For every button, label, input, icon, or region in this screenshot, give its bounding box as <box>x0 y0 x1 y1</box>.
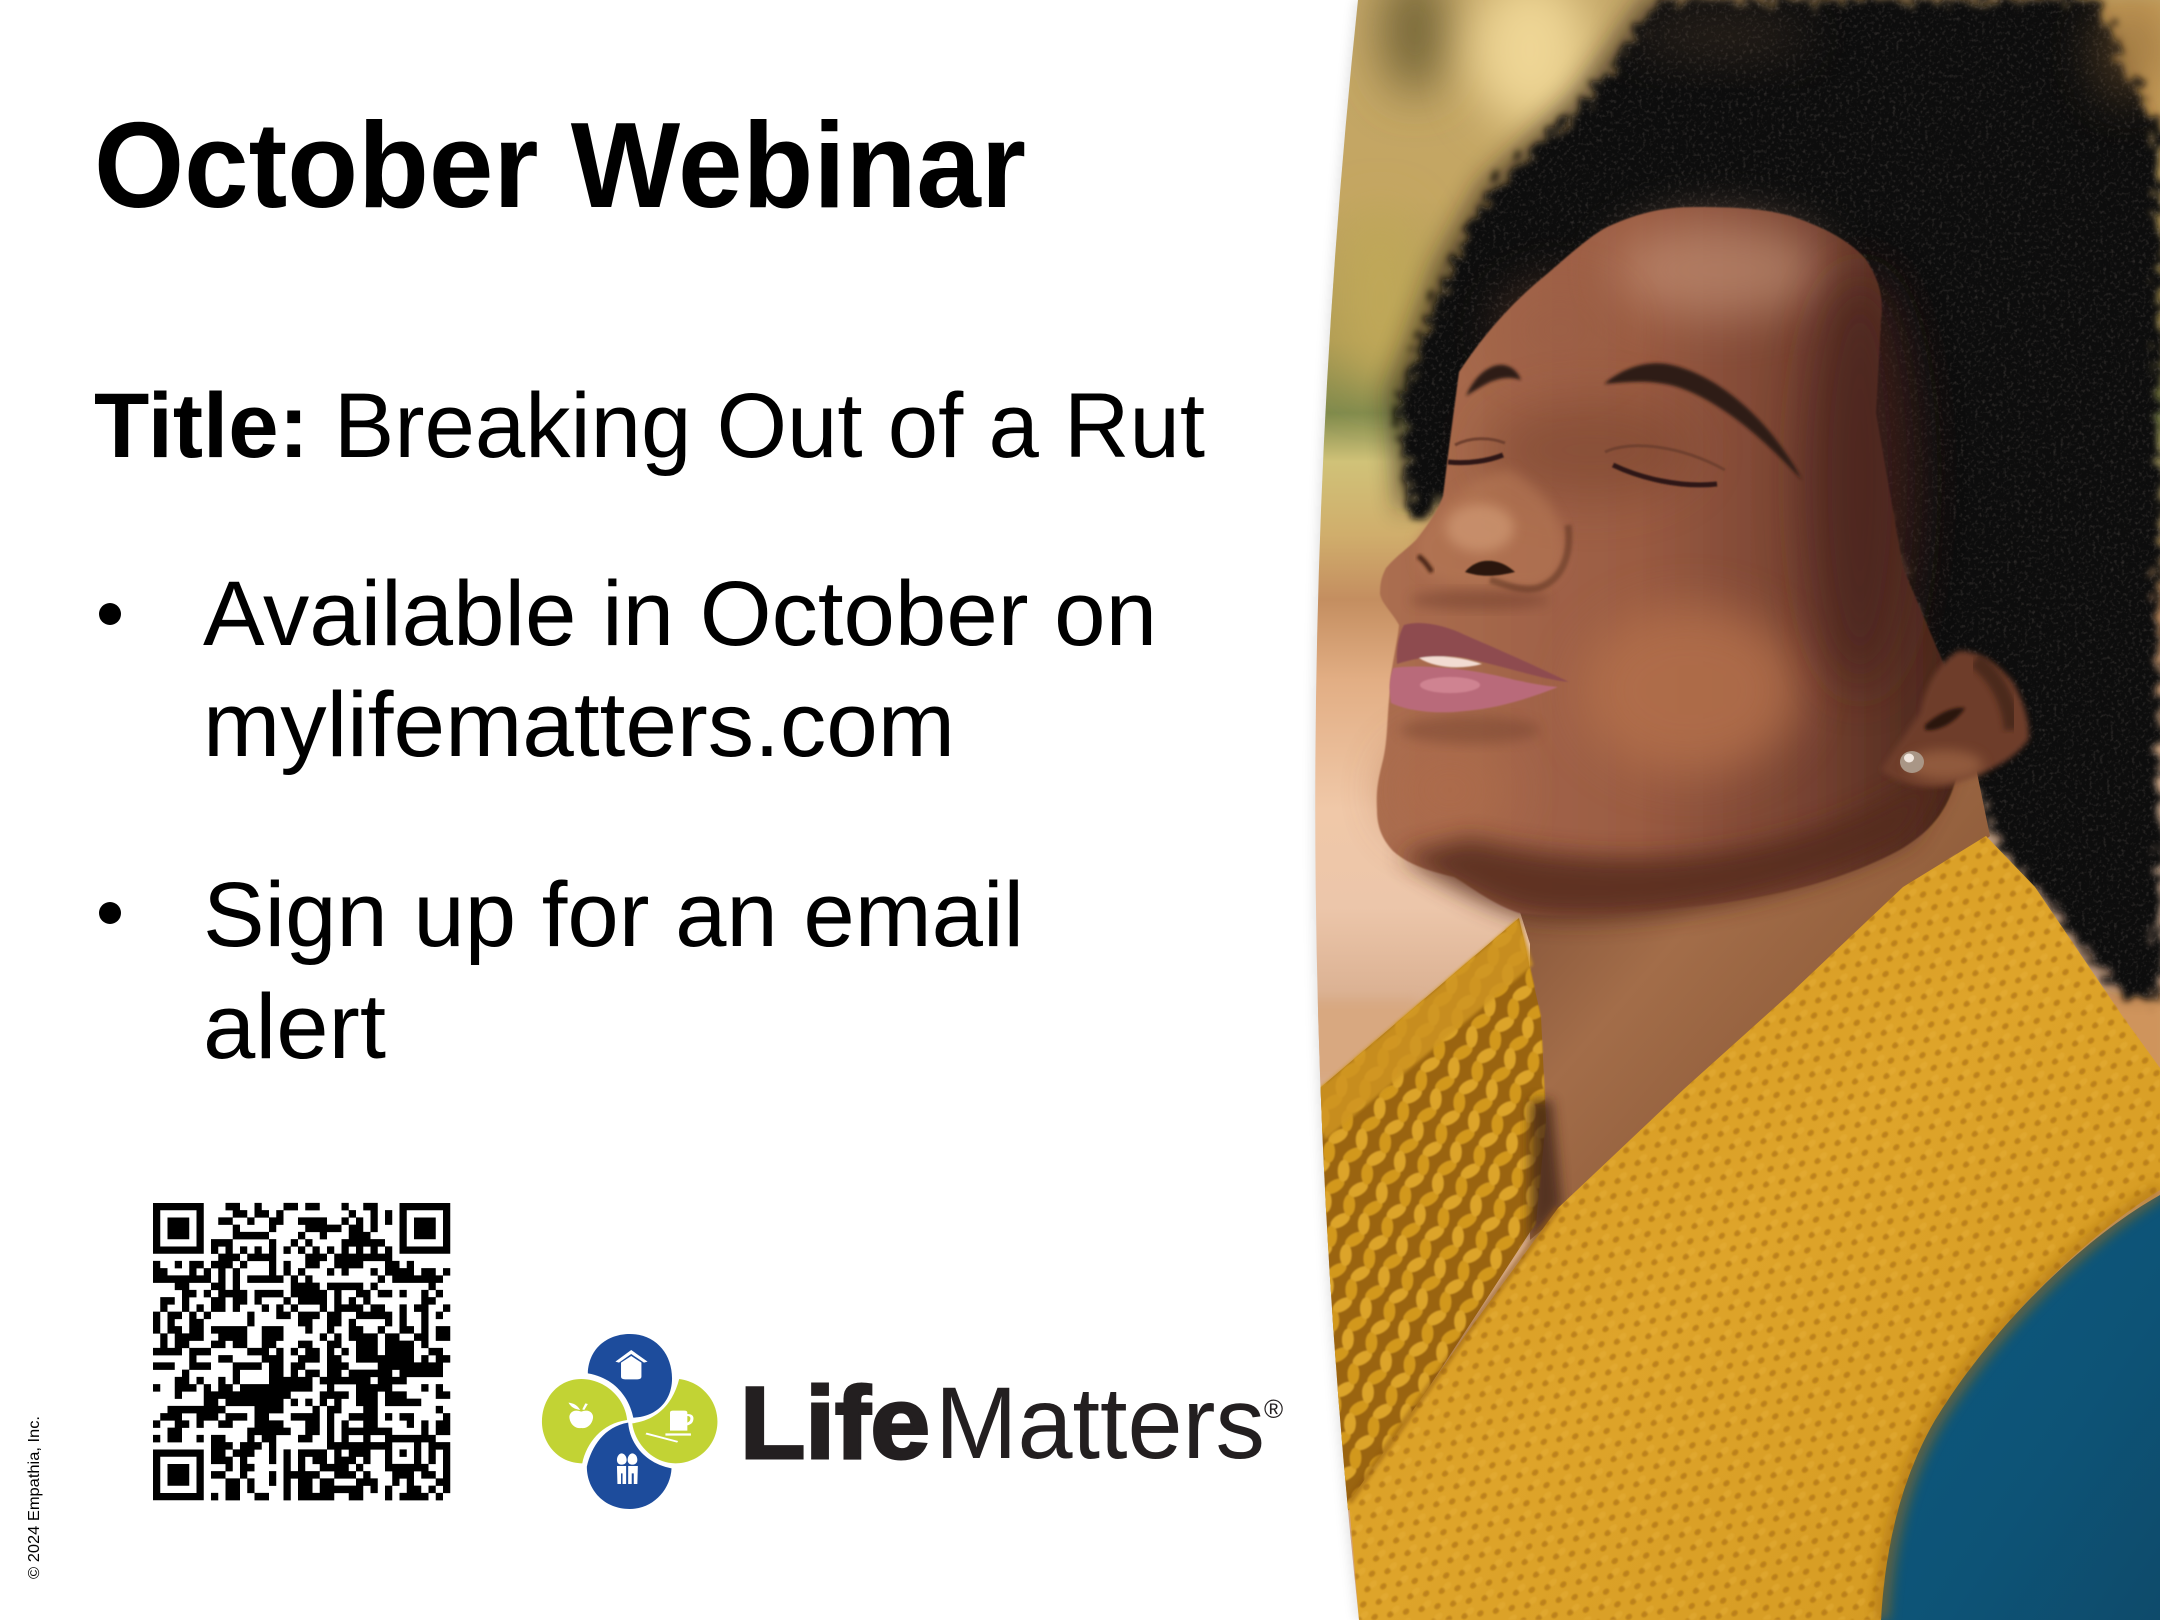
bullet: availability <box>99 563 1157 776</box>
smiling lips <box>1390 623 1569 712</box>
title: October Webinar <box>94 97 1026 233</box>
icon: apple <box>568 1403 593 1428</box>
logo mark: four swirled petals <box>542 1334 717 1509</box>
shirt <box>1875 1195 2160 1620</box>
webinar title line: Title: Breaking Out of a Rut <box>94 375 1205 477</box>
neck shadow at collar <box>1530 1100 1562 1245</box>
scarf: back fold <box>1300 918 1546 1510</box>
photo: woman with closed eyes smiling <box>1280 0 2160 1620</box>
LifeMatters logo: ® <box>1264 1394 1283 1424</box>
closed eyes <box>1448 439 1725 485</box>
neck <box>1520 772 1990 1240</box>
eyebrows <box>1466 363 1802 480</box>
LifeMatters logo: Matters <box>935 1366 1265 1480</box>
bullet: email alert: Sign up for an email <box>203 864 1024 966</box>
face <box>1377 207 1958 919</box>
LifeMatters logo <box>542 1334 1283 1509</box>
hair <box>1380 0 2160 1020</box>
icon: two people <box>617 1453 638 1484</box>
bullet: availability: mylifematters.com <box>203 674 955 776</box>
copyright: © 2024 Empathia, Inc. <box>26 1416 43 1579</box>
icon: mug <box>646 1411 693 1443</box>
icon: house with plant <box>615 1350 648 1379</box>
photo background: blurred autumn park <box>1280 0 2160 1620</box>
scarf: front fold <box>1349 836 2160 1620</box>
earring <box>1900 751 1924 773</box>
bullet: email alert: alert <box>203 976 386 1078</box>
logo wordmark: Life <box>740 1366 930 1480</box>
bullet: email alert <box>99 864 1024 1078</box>
bullet: availability: Available in October on <box>203 563 1157 665</box>
nose <box>1410 470 1569 610</box>
QR code <box>153 1203 450 1500</box>
jaw shadow <box>1392 806 1931 934</box>
photo edge shadow <box>1313 0 1418 1620</box>
ear <box>1881 651 2029 787</box>
